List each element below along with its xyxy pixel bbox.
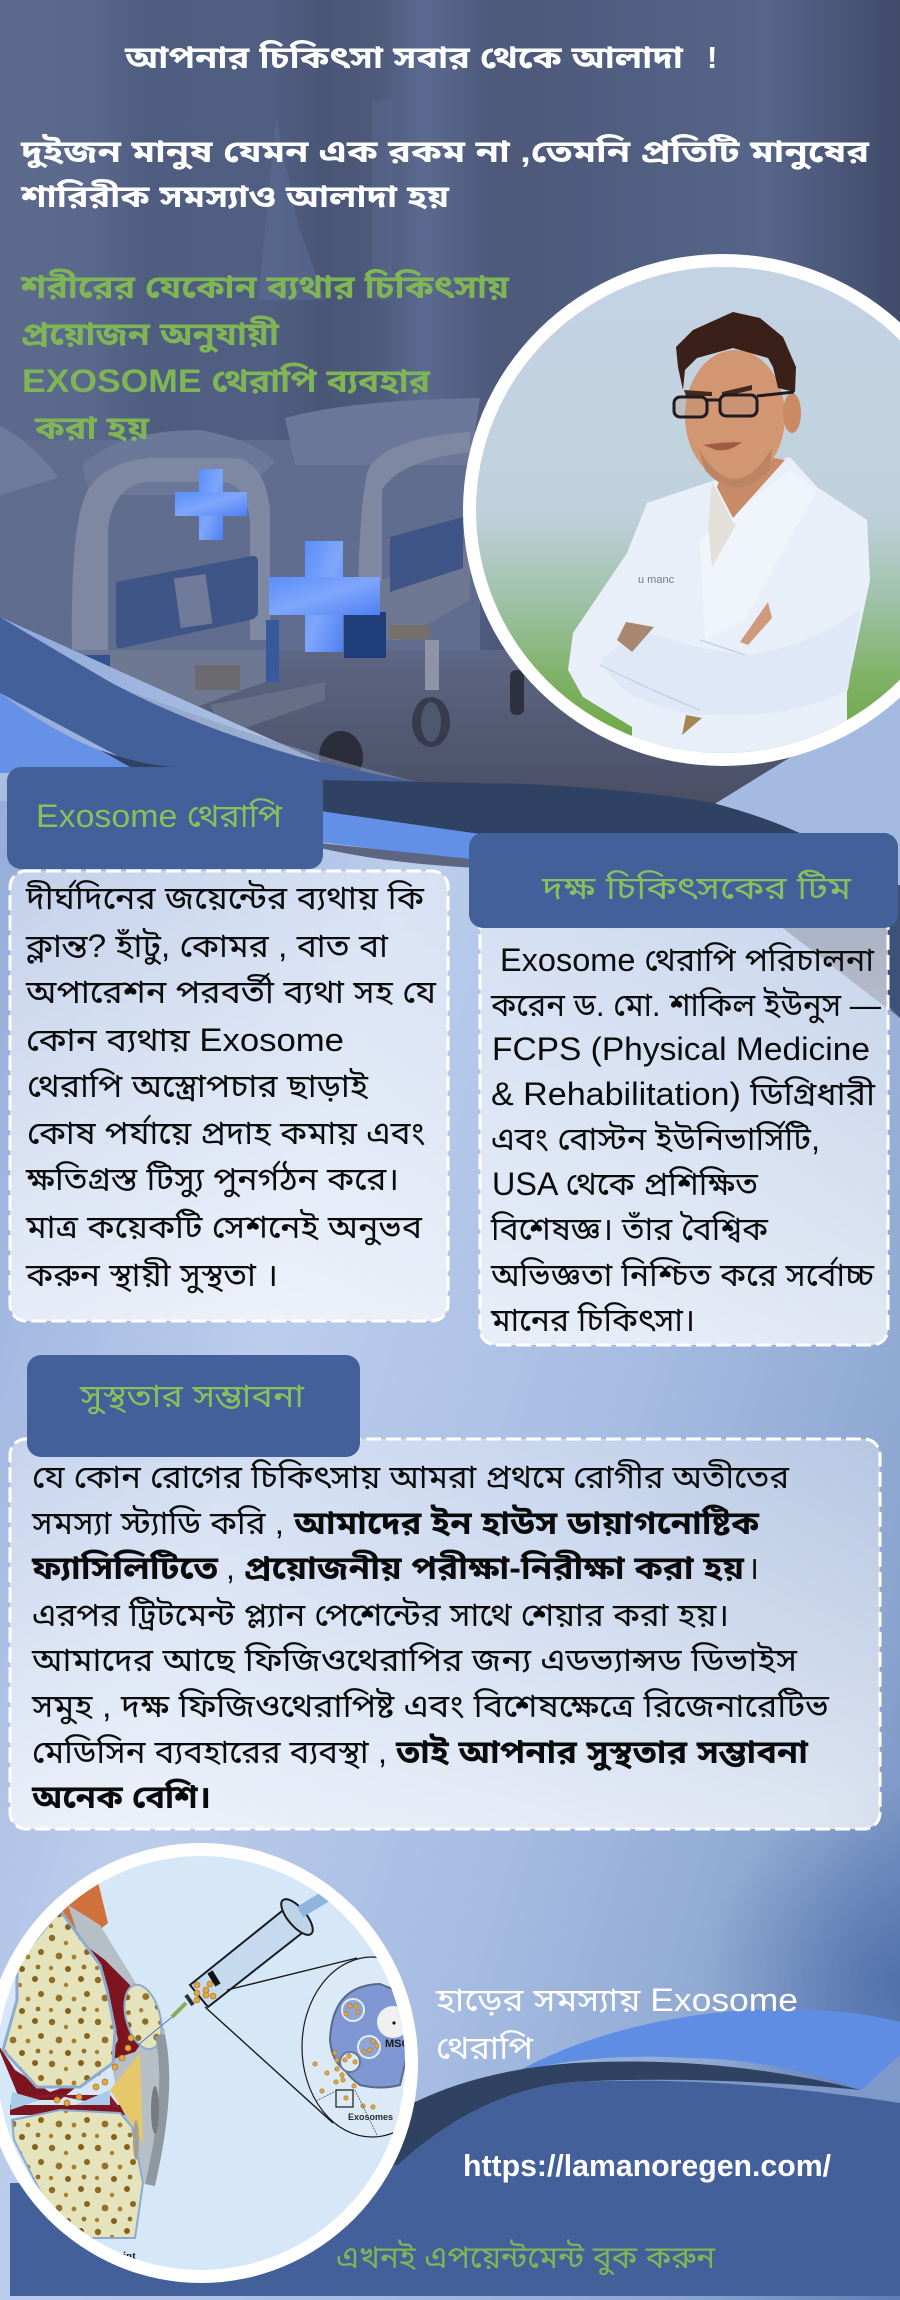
meniscus <box>10 2090 110 2110</box>
face <box>685 350 785 482</box>
decorative waves, top <box>0 617 900 1018</box>
heading tab: wellness chances: সুস্থতার সম্ভাবনা <box>79 1378 305 1415</box>
doctor portrait <box>463 254 900 766</box>
panel: expert team: & Rehabilitation) ডিগ্রিধারী <box>491 1076 876 1112</box>
call to action: এখনই এপয়েন্টমেন্ট বুক করুন <box>336 2240 715 2275</box>
green highlight text: প্রয়োজন অনুযায়ী <box>21 316 280 353</box>
tibia <box>12 2110 143 2238</box>
panel: expert team: বিশেষজ্ঞ। তাঁর বৈশ্বিক <box>490 1211 769 1247</box>
caption: bone problems <box>435 1982 798 2066</box>
green highlight text <box>20 269 510 446</box>
green highlight text: করা হয় <box>34 410 150 446</box>
green highlight text: EXOSOME থেরাপি ব্যবহার <box>22 363 431 399</box>
panel: wellness chances: অনেক বেশি। <box>31 1779 211 1815</box>
panel: expert team: এবং বোস্টন ইউনিভার্সিটি, <box>491 1120 820 1157</box>
icon: medical cross large <box>269 541 380 652</box>
panel: wellness chances: ফ্যাসিলিটিতে <box>31 1550 219 1586</box>
illustration: knee joint exosome injection <box>0 1843 442 2283</box>
hair <box>676 312 796 392</box>
panel: exosome therapy: মাত্র কয়েকটি সেশনেই অনুভব <box>25 1209 423 1246</box>
panel: wellness chances: আমাদের আছে ফিজিওথেরাপির জন্য এডভ্যান্সড ডিভাইস <box>31 1642 798 1678</box>
panel: exosome therapy: থেরাপি অস্ত্রোপচার ছাড়াই <box>27 1068 369 1104</box>
neck and shirt <box>717 458 785 518</box>
title: আপনার চিকিৎসা সবার থেকে আলাদা <box>124 39 684 75</box>
brows and mouth <box>684 390 712 396</box>
panel: exosome therapy: দীর্ঘদিনের জয়েন্টের ব্যথায় কি <box>25 879 425 916</box>
panel: expert team: FCPS (Physical Medicine <box>492 1031 870 1067</box>
forearm details <box>740 602 772 645</box>
panel: exosome therapy: অপারেশন পরবর্তী ব্যথা সহ যে <box>25 972 437 1010</box>
femur <box>3 1910 115 2087</box>
window glow <box>258 118 325 300</box>
decorative waves, bottom <box>10 2009 900 2296</box>
panel: wellness chances <box>10 1439 880 1829</box>
panel: wellness chances: তাই আপনার সুস্থতার সম্ভাবনা <box>395 1734 809 1771</box>
website link: https://lamanoregen.com/ <box>463 2148 831 2183</box>
panel: exosome therapy: কোন ব্যথায় Exosome <box>26 1022 344 1058</box>
magnified view: MSC <box>385 2038 410 2050</box>
bedding zone <box>0 440 480 650</box>
heading tab: expert team: দক্ষ চিকিৎসকের টিম <box>541 870 851 906</box>
panel: expert team: অভিজ্ঞতা নিশ্চিত করে সর্বোচ্চ <box>490 1256 875 1293</box>
patella <box>123 1984 162 2050</box>
heading tab: wellness chances <box>27 1355 360 1457</box>
panel: exosome therapy <box>10 871 448 1321</box>
panel: wellness chances: যে কোন রোগের চিকিৎসায় আমরা প্রথমে রোগীর অতীতের <box>32 1459 790 1495</box>
panel: wellness chances: প্রয়োজনীয় পরীক্ষা-নিরীক্ষা করা হয় <box>244 1550 745 1586</box>
panel: wellness chances: । <box>747 1550 759 1586</box>
heading tab: expert team <box>469 833 898 928</box>
logo: u manc <box>638 574 675 586</box>
exosome particles in joint <box>54 2035 134 2106</box>
casters <box>412 697 450 747</box>
red cavity <box>0 1945 140 2115</box>
panel: expert team: করেন ড. মো. শাকিল ইউনুস — <box>490 987 881 1024</box>
panel: wellness chances: এরপর ট্রিটমেন্ট প্ল্যান পেশেন্টের সাথে শেয়ার করা হয়। <box>32 1597 729 1633</box>
subtitle <box>20 133 869 214</box>
syringe <box>172 2003 186 2017</box>
grey ligament band <box>150 2035 164 2185</box>
heading tab: exosome therapy: Exosome থেরাপি <box>36 798 283 834</box>
panel: wellness chances: , <box>226 1550 235 1586</box>
fat pad <box>110 2053 143 2143</box>
magnified view: Exosomes <box>348 2112 393 2122</box>
panel: wellness chances: মেডিসিন ব্যবহারের ব্যবস্থা , <box>32 1734 387 1770</box>
caption fragment: Joint <box>112 2250 136 2262</box>
caption: bone problems: হাড়ের সমস্যায় Exosome <box>435 1982 798 2018</box>
floor <box>74 650 790 804</box>
panel: exosome therapy: ক্লান্ত? হাঁটু, কোমর , বাত বা <box>25 928 389 966</box>
glasses <box>674 397 707 417</box>
panel: expert team <box>480 900 888 1345</box>
subtitle: দুইজন মানুষ যেমন এক রকম না ,তেমনি প্রতিটি মানুষের <box>20 133 869 170</box>
panel: wellness chances: সমুহ , দক্ষ ফিজিওথেরাপিষ্ট এবং বিশেষক্ষেত্রে রিজেনারেটিভ <box>31 1688 830 1725</box>
subtitle: শারিরীক সমস্যাও আলাদা হয় <box>20 178 450 214</box>
pillows <box>0 425 58 495</box>
panel: exosome therapy: ক্ষতিগ্রস্ত টিস্যু পুনর্গঠন করে। <box>25 1160 399 1198</box>
needle line <box>138 2017 172 2045</box>
coat <box>568 457 870 760</box>
magnified view <box>301 1956 405 2138</box>
panel: exosome therapy: করুন স্থায়ী সুস্থতা । <box>25 1257 278 1294</box>
green highlight text: শরীরের যেকোন ব্যথার চিকিৎসায় <box>20 269 510 305</box>
bed two headboard <box>358 432 470 590</box>
panel: wellness chances: আমাদের ইন হাউস ডায়াগনোষ্টিক <box>293 1505 760 1541</box>
bed one headboard <box>72 458 270 650</box>
heading tab: exosome therapy <box>7 767 323 869</box>
caption: bone problems: থেরাপি <box>436 2030 534 2066</box>
icon: medical cross small <box>175 469 247 540</box>
panel: wellness chances: সমস্যা স্ট্যাডি করি , <box>31 1505 284 1541</box>
title: ! <box>707 40 717 75</box>
panel: exosome therapy: কোষ পর্যায়ে প্রদাহ কমায় এবং <box>27 1114 425 1151</box>
panel: expert team: মানের চিকিৎসা। <box>490 1302 695 1338</box>
panel: expert team: Exosome থেরাপি পরিচালনা <box>500 942 874 978</box>
magnifier lines <box>205 1958 357 2123</box>
muscle <box>62 1884 108 1931</box>
background photo: hospital ward <box>0 0 900 810</box>
panel: expert team: USA থেকে প্রশিক্ষিত <box>492 1166 758 1202</box>
tendon and soft tissue <box>68 1905 165 2185</box>
